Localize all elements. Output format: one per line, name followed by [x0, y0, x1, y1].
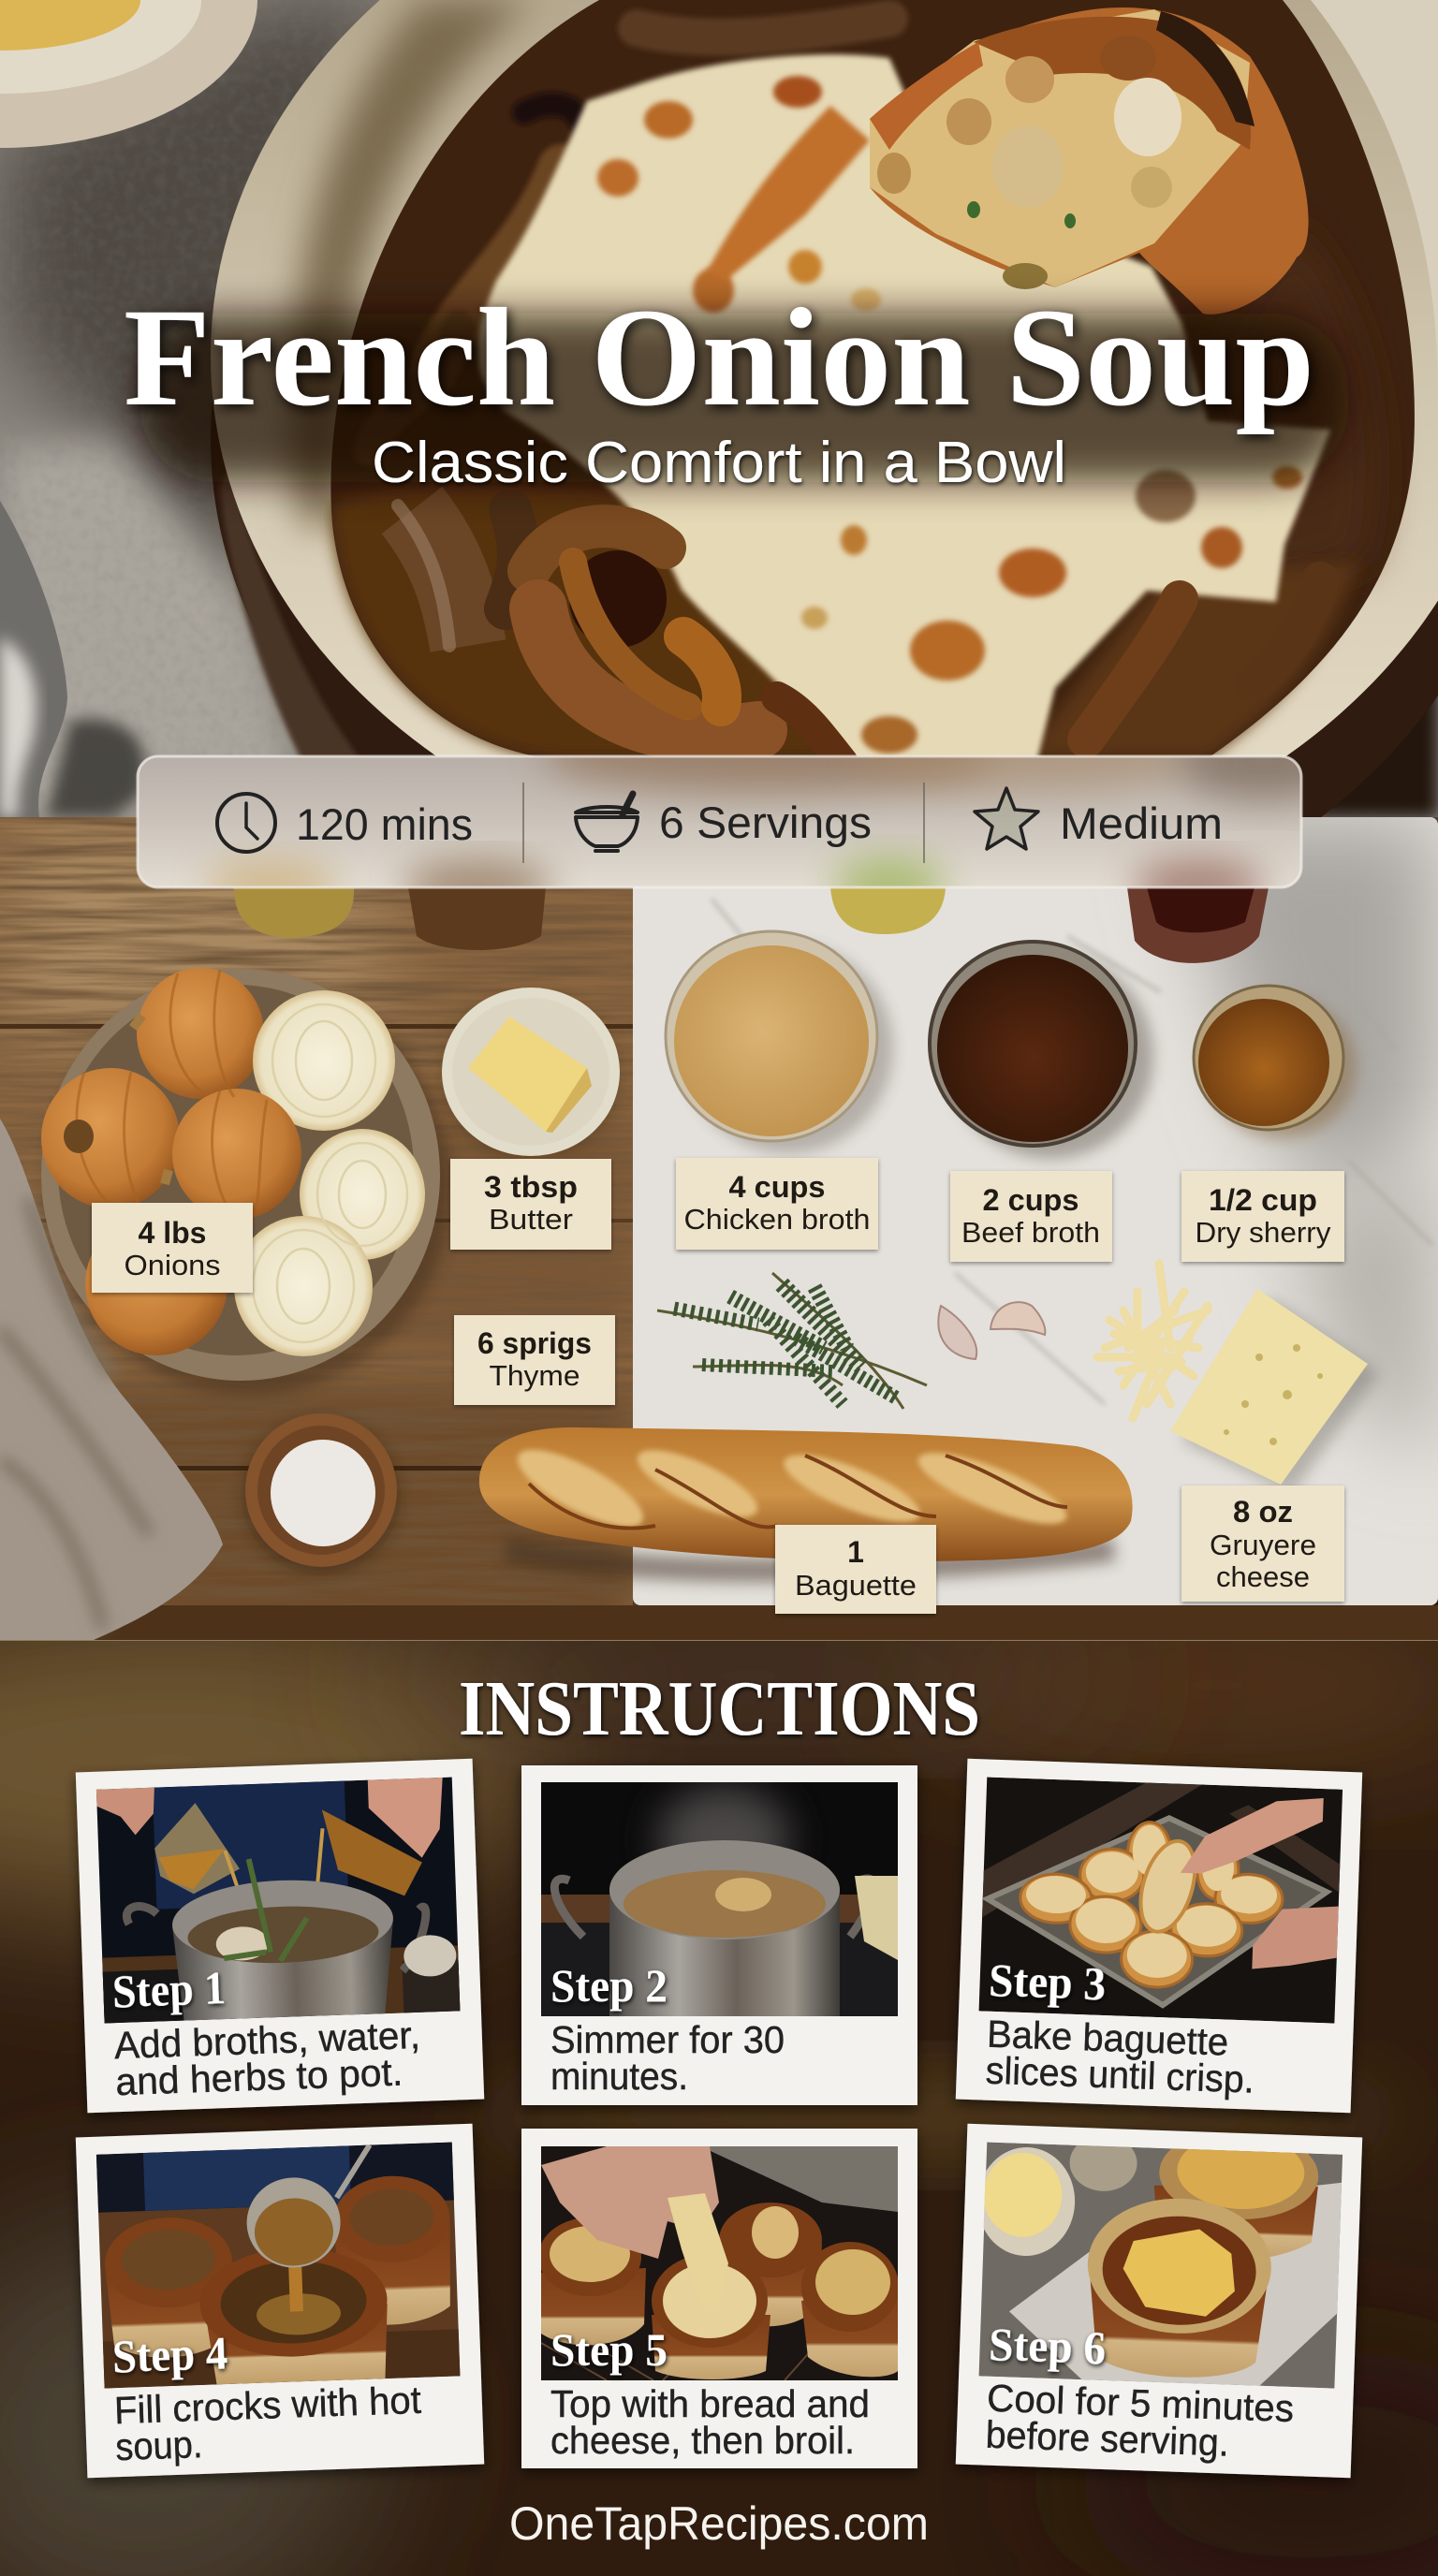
step card 1: [76, 1759, 484, 2113]
step 6 text: before serving.: [985, 2413, 1230, 2465]
step 5 text: cheese, then broil.: [550, 2419, 855, 2462]
label: butter: [450, 1159, 611, 1250]
step 1 text: Add broths, water,: [113, 2013, 421, 2067]
step 4 text: soup.: [115, 2422, 203, 2468]
upper dark onions: [370, 19, 889, 449]
crock left: [538, 2217, 646, 2345]
wooden table: [0, 817, 637, 1640]
label: gruyere cheese: 8 oz: [1233, 1495, 1293, 1529]
step 3 photo: [979, 1777, 1343, 2024]
spoon: [0, 501, 145, 817]
step 3 text: Bake baguette: [986, 2012, 1229, 2064]
ingredient labels: [92, 1158, 1344, 1614]
label: beef broth: [950, 1171, 1112, 1262]
step 2 text: Simmer for 30: [550, 2018, 785, 2061]
salt bowl: [244, 1413, 398, 1573]
label: thyme: 6 sprigs: [477, 1326, 592, 1360]
step 5 text: Top with bread and: [550, 2382, 870, 2425]
step 2 badge: Step 2: [550, 1959, 668, 2012]
label: gruyere cheese: cheese: [1216, 1560, 1310, 1593]
crock front: [652, 2254, 770, 2379]
label: baguette: 1: [847, 1535, 864, 1569]
bowl rim: [211, 0, 1438, 756]
label: chicken broth: Chicken broth: [683, 1203, 871, 1236]
step 1 text: and herbs to pot.: [115, 2051, 404, 2103]
melted cheese: [478, 54, 1330, 760]
subtitle: Classic Comfort in a Bowl: [372, 431, 1066, 495]
caramelised onions: [398, 505, 1320, 763]
label: gruyere cheese: [1181, 1486, 1344, 1602]
step 4 text: Fill crocks with hot: [113, 2378, 422, 2432]
crock back: [719, 2203, 822, 2326]
step 6 badge: Step 6: [988, 2318, 1107, 2374]
step 4 badge: Step 4: [111, 2326, 228, 2382]
icon: bowl and spoon: [576, 794, 638, 851]
label: baguette: [775, 1525, 936, 1614]
shredded gruyere: [1097, 1264, 1208, 1418]
gruyere wedge: [1170, 1289, 1379, 1494]
footer website: OneTapRecipes.com: [509, 2497, 929, 2550]
label: thyme: Thyme: [489, 1359, 580, 1392]
icon: clock: [217, 794, 275, 852]
label: beef broth: 2 cups: [983, 1183, 1078, 1217]
stats bar: [138, 719, 1348, 913]
label: onions: Onions: [124, 1249, 221, 1281]
step card 2: [521, 1765, 917, 2105]
step 5 photo: [541, 2146, 898, 2380]
marble slab: [0, 817, 1438, 1640]
section heading: INSTRUCTIONS: [459, 1665, 980, 1752]
step card 5: [521, 2129, 917, 2468]
step 6 photo: [979, 2142, 1343, 2389]
label: chicken broth: [676, 1158, 878, 1250]
step 5 badge: Step 5: [550, 2323, 668, 2376]
step 3 text: slices until crisp.: [985, 2049, 1255, 2101]
hero photo: soup bowl: [0, 0, 1438, 817]
title: French Onion Soup: [124, 280, 1314, 435]
linen towel: [0, 1119, 223, 1640]
step card 6: [956, 2120, 1362, 2478]
sherry glass: [1194, 986, 1356, 1138]
stat: servings: 6 Servings: [659, 798, 872, 847]
label: thyme: [454, 1315, 615, 1405]
label: onions: 4 lbs: [139, 1216, 206, 1250]
label: onions: [92, 1203, 253, 1293]
step 1 badge: Step 1: [111, 1961, 227, 2017]
chicken broth bowl: [666, 931, 893, 1153]
soup broth: [330, 0, 1415, 760]
title scrim: [140, 314, 1348, 482]
label: chicken broth: 4 cups: [728, 1170, 826, 1204]
butter dish: [442, 988, 620, 1161]
onions on plate: [41, 968, 451, 1395]
label: baguette: Baguette: [795, 1569, 917, 1602]
instructions panel: [0, 1601, 1438, 2576]
step 1 photo: [95, 1777, 461, 2024]
garlic cloves: [938, 1302, 1045, 1359]
step 3 badge: Step 3: [988, 1954, 1107, 2010]
step 2 photo: [541, 1782, 898, 2016]
baguette: [479, 1427, 1133, 1571]
toasted bread: [707, 7, 1309, 315]
crock wall: [211, 399, 1438, 817]
browned cheese spots: [597, 76, 1302, 754]
label: gruyere cheese: Gruyere: [1210, 1529, 1316, 1561]
step card 3: [956, 1759, 1362, 2113]
label: dry sherry: 1/2 cup: [1209, 1183, 1317, 1217]
small side bowl: [0, 0, 257, 148]
beef broth bowl: [930, 942, 1153, 1159]
icon: star: [975, 788, 1038, 849]
label: butter: Butter: [489, 1203, 573, 1236]
stat: time: 120 mins: [296, 799, 473, 849]
label: butter: 3 tbsp: [484, 1170, 578, 1204]
stat: difficulty: Medium: [1060, 798, 1223, 848]
crock right: [801, 2242, 899, 2377]
thyme sprigs: [657, 1273, 927, 1409]
glass jars behind bar: [234, 887, 1269, 963]
step 6 text: Cool for 5 minutes: [986, 2377, 1295, 2430]
label: beef broth: Beef broth: [961, 1216, 1100, 1249]
ingredients panel: [0, 817, 1438, 1640]
step card 4: [76, 2124, 484, 2478]
label: dry sherry: [1181, 1171, 1344, 1262]
label: dry sherry: Dry sherry: [1195, 1216, 1331, 1249]
step 4 photo: [95, 2142, 461, 2389]
step 2 text: minutes.: [550, 2055, 688, 2098]
